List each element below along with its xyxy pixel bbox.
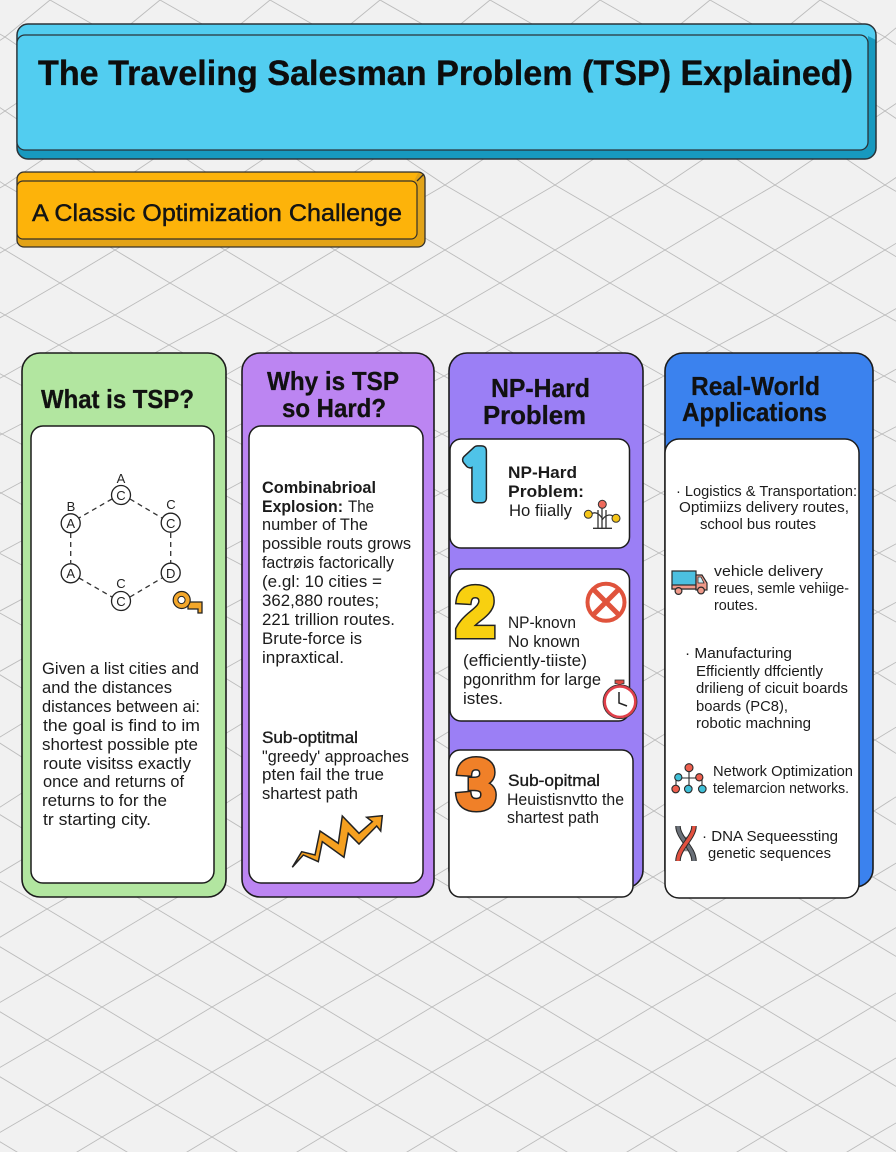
diagram: city route hexagon — [61, 471, 180, 610]
heading: real-world applications — [682, 371, 827, 427]
diagram: city route hexagon: C — [116, 594, 126, 609]
text: combinatorial explosion: Explosion: — [262, 498, 343, 516]
text: no known algorithm: istes. — [463, 690, 503, 708]
text: TSP definition — [42, 660, 200, 829]
diagram: city route hexagon: C — [166, 497, 176, 512]
text: sub-optimal approaches: Sub-optitmal — [262, 729, 358, 747]
text: combinatorial explosion: 221 trillion routes. — [262, 611, 395, 629]
text: manufacturing: · Manufacturing — [685, 645, 792, 662]
icon: network nodes — [672, 764, 706, 793]
text: TSP definition: once and returns of — [43, 773, 184, 791]
text: combinatorial explosion: inpraxtical. — [262, 649, 344, 667]
icon: decision tree — [584, 500, 620, 528]
panel: why is TSP so hard — [242, 353, 434, 897]
text: logistics and transportation: Optimiizs delivery routes, — [679, 499, 849, 516]
heading: why is TSP so hard: so Hard? — [282, 393, 386, 423]
text: vehicle delivery: reues, semle vehiige- — [714, 580, 849, 597]
text: heuristics note — [507, 772, 624, 827]
text: TSP definition: and the distances — [42, 679, 172, 697]
diagram: city route hexagon: C — [116, 576, 126, 591]
card 1: no efficient solution — [450, 439, 630, 548]
text: NP-hard note: Problem: — [508, 483, 584, 501]
numeral 1: 1 — [458, 444, 497, 509]
card 2: no known algorithm — [450, 569, 637, 721]
diagram: city route hexagon: A — [117, 471, 126, 486]
white content card — [249, 426, 423, 883]
text: no known algorithm: pgonrithm for large — [463, 671, 601, 689]
text: combinatorial explosion: Combinabrioal — [262, 479, 376, 497]
heading: NP-hard problem: NP-Hard — [491, 373, 590, 403]
subtitle banner — [17, 172, 425, 247]
text: manufacturing: drilieng of cicuit boards — [696, 680, 848, 697]
icon: stopwatch — [603, 680, 637, 719]
card 3: heuristics — [449, 745, 633, 897]
text: manufacturing — [685, 645, 848, 732]
text: heuristics note: shartest path — [507, 809, 599, 827]
text: logistics and transportation: · Logistics & Transportation: — [676, 483, 857, 500]
diagram: city route hexagon: A — [66, 566, 75, 581]
numeral 3: 3 — [457, 745, 496, 823]
text: no known algorithm: NP-knovn — [508, 614, 576, 632]
diagram: city route hexagon: A — [66, 516, 75, 531]
icon: DNA helix — [678, 826, 694, 861]
icon: delivery truck — [672, 571, 707, 594]
text: combinatorial explosion: The — [348, 498, 374, 516]
text: logistics and transportation: school bus routes — [700, 516, 816, 533]
diagram: city route hexagon: B — [67, 499, 75, 514]
text: combinatorial explosion: Brute-force is — [262, 630, 362, 648]
text: vehicle delivery: routes. — [714, 597, 758, 614]
heading: real-world applications: Applications — [682, 397, 827, 427]
text: TSP definition: distances between ai: — [42, 698, 200, 716]
text: manufacturing: Efficiently dffciently — [696, 663, 823, 680]
icon: zigzag arrow — [292, 816, 382, 867]
text: sub-optimal approaches: shartest path — [262, 785, 358, 803]
text: TSP definition: tr starting city. — [43, 811, 151, 829]
diagram: city route hexagon: C — [166, 516, 175, 531]
text: combinatorial explosion — [262, 479, 411, 667]
text: network optimization — [713, 763, 853, 797]
text: TSP definition: the goal is find to im — [43, 717, 200, 735]
text: combinatorial explosion: number of The — [262, 516, 368, 534]
text: sub-optimal approaches: "greedy' approaches — [262, 748, 409, 766]
text: manufacturing: boards (PC8), — [696, 698, 788, 715]
text: DNA sequencing: · DNA Sequeessting — [702, 828, 838, 845]
text: TSP definition: shortest possible pte — [42, 736, 198, 754]
text: no known algorithm: No known — [508, 633, 580, 651]
numeral 2: 2 — [456, 573, 495, 651]
title banner — [17, 24, 876, 159]
text: logistics and transportation — [676, 483, 857, 533]
panel: NP-hard problem — [449, 353, 643, 897]
text: vehicle delivery — [714, 563, 849, 614]
icon: red cross circle — [588, 584, 624, 621]
text: sub-optimal approaches: pten fail the true — [262, 766, 384, 784]
heading: what is TSP: What is TSP? — [41, 384, 194, 414]
text: no known algorithm — [463, 614, 601, 708]
heading: why is TSP so hard — [267, 366, 399, 423]
text: NP-hard note: Ho fiially — [509, 502, 573, 520]
text: heuristics note: Sub-opitmal — [508, 772, 600, 790]
panel: real-world applications — [665, 353, 873, 898]
diagram: city route hexagon: C — [116, 488, 126, 503]
numeral 2: 2 — [456, 573, 495, 651]
diagram: city route hexagon: D — [166, 566, 175, 581]
title text: The Traveling Salesman Problem (TSP) Explained) — [38, 54, 853, 93]
text: combinatorial explosion: possible routs grows — [262, 535, 411, 553]
text: sub-optimal approaches — [262, 729, 409, 803]
text: NP-hard note: NP-Hard — [508, 464, 577, 482]
heading: NP-hard problem — [483, 373, 590, 430]
numeral 3: 3 — [457, 745, 496, 823]
text: NP-hard note — [508, 464, 584, 520]
text: combinatorial explosion: factrøis factorically — [262, 554, 395, 572]
text: vehicle delivery: vehicle delivery — [714, 563, 824, 580]
text: DNA sequencing: genetic sequences — [708, 845, 831, 862]
text: network optimization: Network Optimization — [713, 763, 853, 780]
text: DNA sequencing — [702, 828, 838, 862]
text: no known algorithm: (efficiently-tiiste) — [463, 652, 587, 670]
text: TSP definition: returns to for the — [42, 792, 167, 810]
heading: real-world applications: Real-World — [691, 371, 820, 401]
heading: why is TSP so hard: Why is TSP — [267, 366, 399, 396]
numeral 1: 1 — [458, 444, 497, 509]
text: TSP definition: Given a list cities and — [42, 660, 199, 678]
subtitle text: A Classic Optimization Challenge — [32, 200, 402, 227]
white content card — [665, 439, 859, 898]
text: combinatorial explosion: (e.gl: 10 cities = — [262, 573, 382, 591]
heading: NP-hard problem: Problem — [483, 400, 586, 430]
text: manufacturing: robotic machning — [696, 715, 811, 732]
text: heuristics note: Heuistisnvtto the — [507, 791, 624, 809]
text: combinatorial explosion: 362,880 routes; — [262, 592, 379, 610]
icon: key — [173, 592, 202, 613]
text: TSP definition: route visitss exactly — [43, 755, 192, 773]
panel: what is TSP — [22, 353, 226, 897]
white content card — [31, 426, 214, 883]
text: network optimization: telemarcion networks. — [713, 780, 849, 797]
